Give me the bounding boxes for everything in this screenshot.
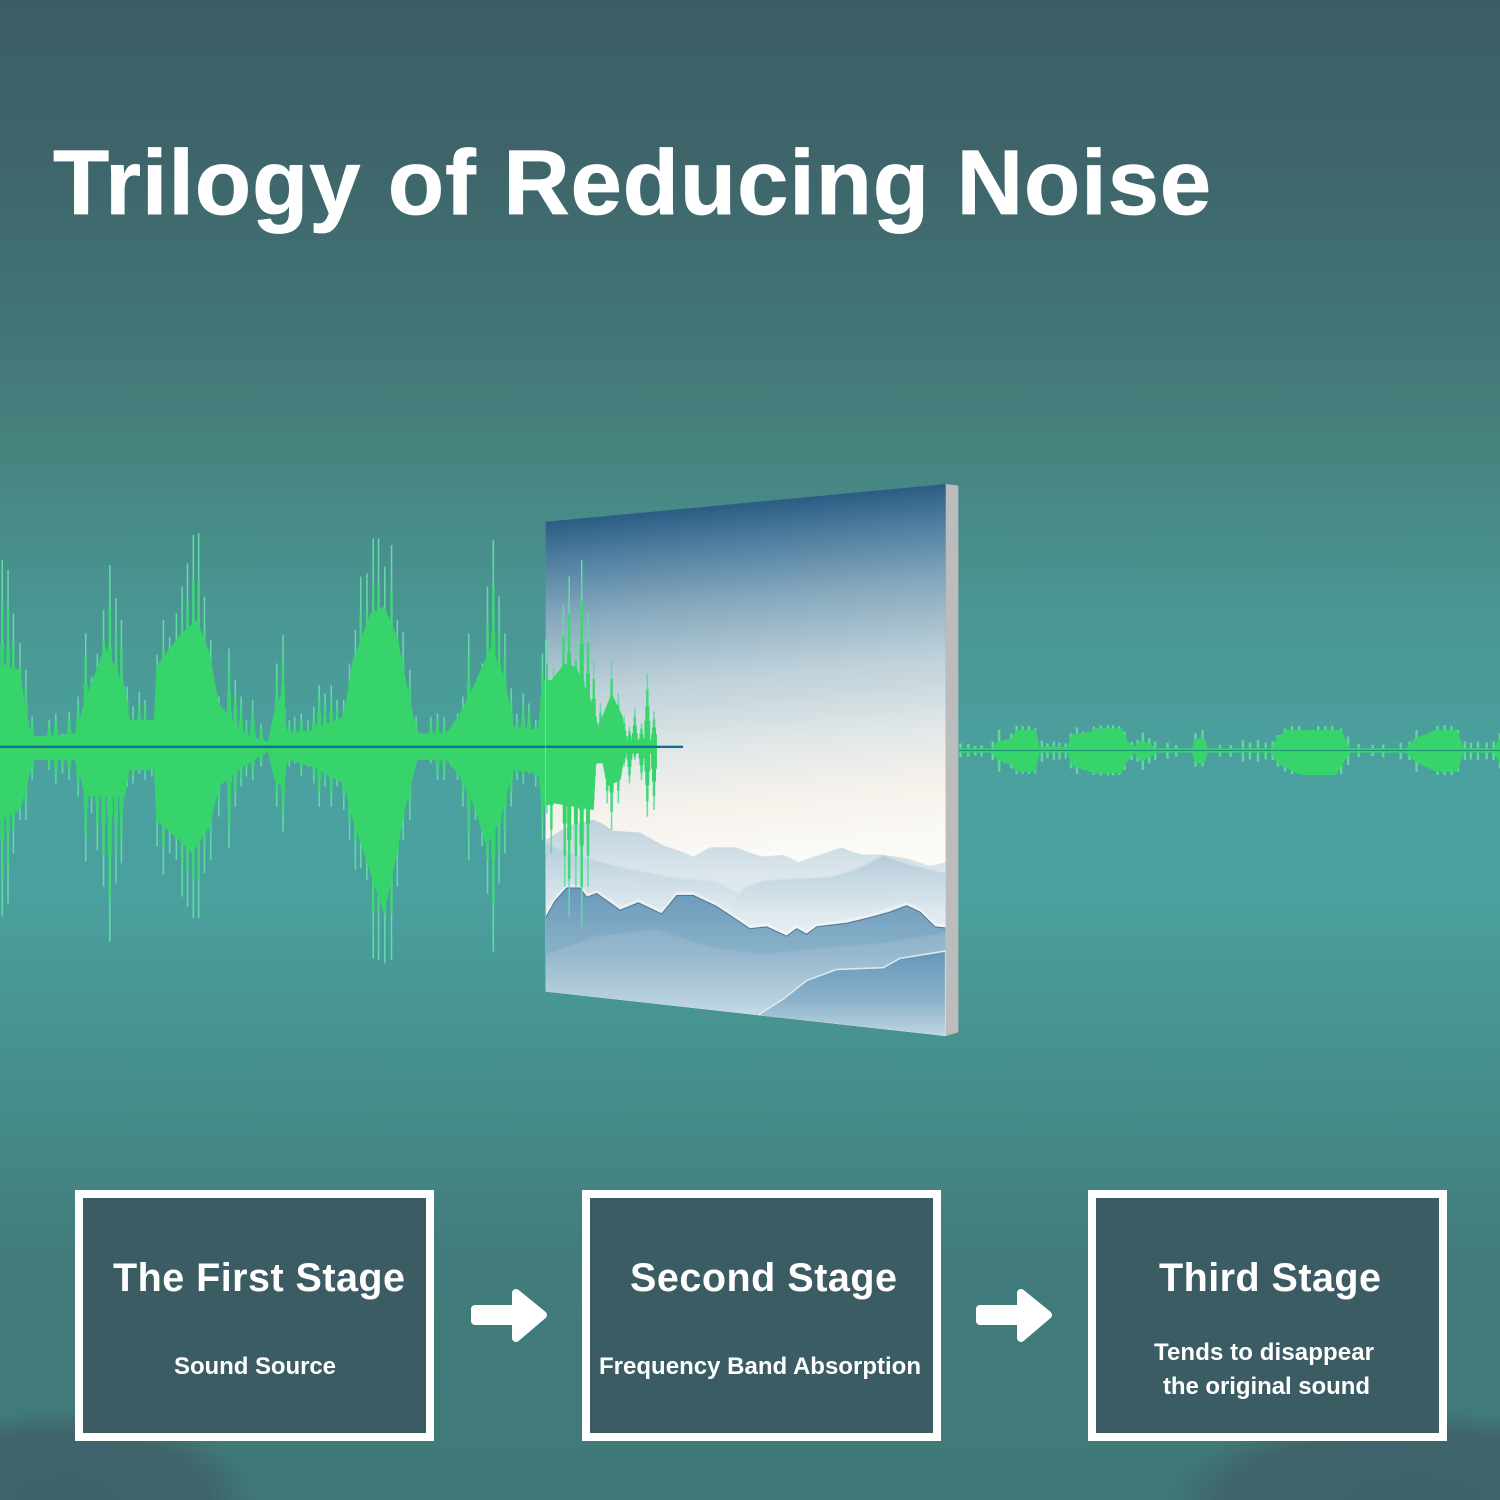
second card description: Frequency Band Absorption: [599, 1353, 921, 1380]
mountain layers clipped to panel face: [546, 820, 946, 1036]
stage card: the first stage: [79, 1194, 430, 1437]
filled spike base above the line: [2, 672, 654, 747]
wave solid body: [0, 607, 654, 913]
second card box: [586, 1194, 937, 1437]
second card heading: Second Stage: [630, 1256, 897, 1300]
stage card: third stage: [1092, 1194, 1443, 1437]
foreground mountain: [760, 951, 946, 1036]
acoustic panel: [546, 484, 958, 1036]
center blue line: [0, 746, 683, 748]
far mountain range: [546, 820, 946, 951]
reduced wave solid body: [959, 728, 1500, 775]
panel sky face: [546, 484, 946, 1036]
front range mist layer: [546, 929, 945, 990]
sound wave: original sound entering panel: [0, 533, 683, 963]
third card box: [1092, 1194, 1443, 1437]
sound wave: reduced sound after panel: [959, 725, 1500, 775]
third card description line 2: the original sound: [1163, 1373, 1370, 1400]
panel edge highlight on wave: [544, 640, 547, 853]
thin spike tips above the line: [2, 533, 654, 747]
thickest spike base above the line: [2, 629, 654, 747]
thicker spike bodies above the line: [2, 580, 654, 747]
lower right corner shade: [1160, 1380, 1500, 1500]
stage card: second stage: [586, 1194, 937, 1437]
front mountain range: [546, 888, 946, 1015]
lower left corner shade: [0, 1380, 260, 1500]
first card description: Sound Source: [174, 1353, 336, 1380]
reduced wave spikes: [961, 725, 1500, 775]
arrow: second to third: [980, 1293, 1048, 1338]
middle mountain range left: [546, 844, 738, 906]
thicker spike bodies below the line: [2, 747, 654, 916]
thin spike tips below the line: [2, 747, 654, 963]
thickest spike base below the line: [2, 747, 654, 866]
third card heading: Third Stage: [1159, 1256, 1381, 1300]
panel side edge: [946, 484, 958, 1036]
reduced wave center line: [959, 750, 1500, 751]
first card heading: The First Stage: [113, 1256, 405, 1300]
first card box: [79, 1194, 430, 1437]
filled spike base below the line: [2, 747, 654, 822]
third card description line 1: Tends to disappear: [1154, 1339, 1374, 1366]
middle mountain range right: [740, 856, 946, 924]
title: Trilogy of Reducing Noise: [53, 132, 1211, 234]
ridge glow: [546, 886, 946, 934]
arrow: first to second: [475, 1293, 543, 1338]
front ridge line: [546, 888, 946, 936]
